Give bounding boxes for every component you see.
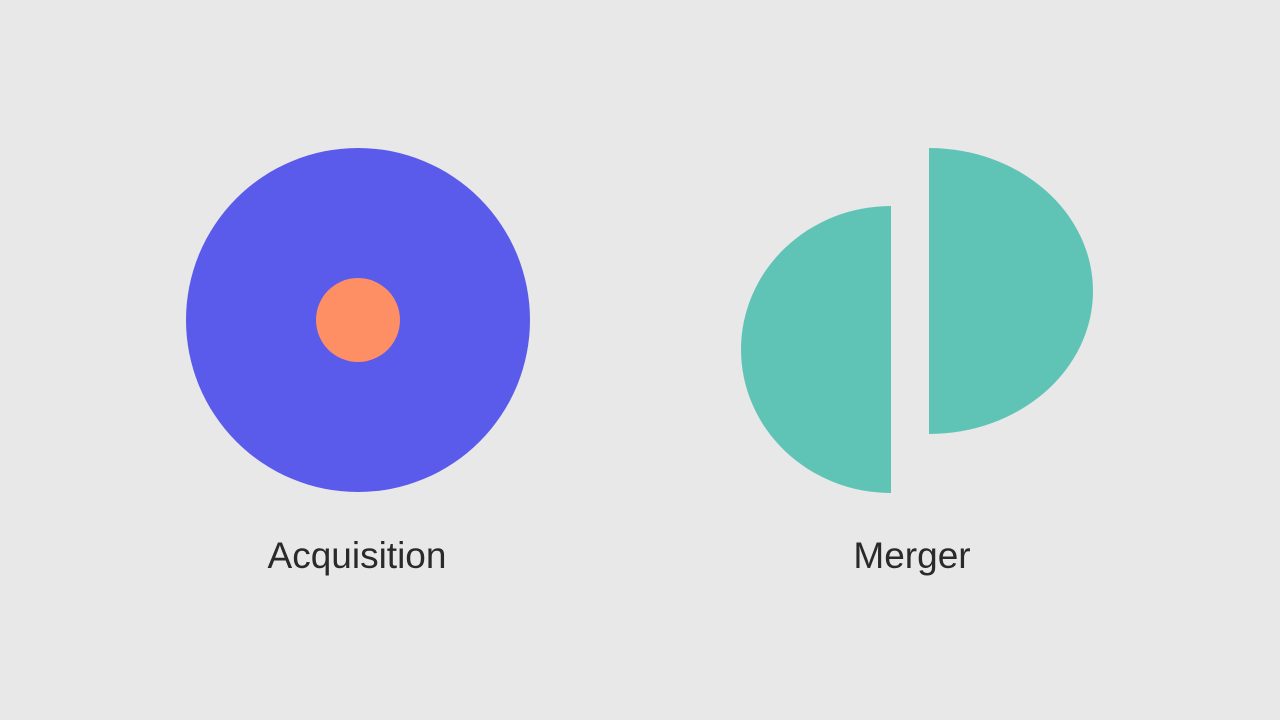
- label: Merger: Merger: [853, 535, 971, 576]
- icon: merger (two half discs): [741, 148, 1093, 493]
- left half disc: [741, 206, 891, 493]
- icon: acquisition (large circle absorbing small circle): [186, 148, 530, 492]
- right half disc: [929, 148, 1093, 434]
- label: Acquisition: Acquisition: [268, 535, 446, 576]
